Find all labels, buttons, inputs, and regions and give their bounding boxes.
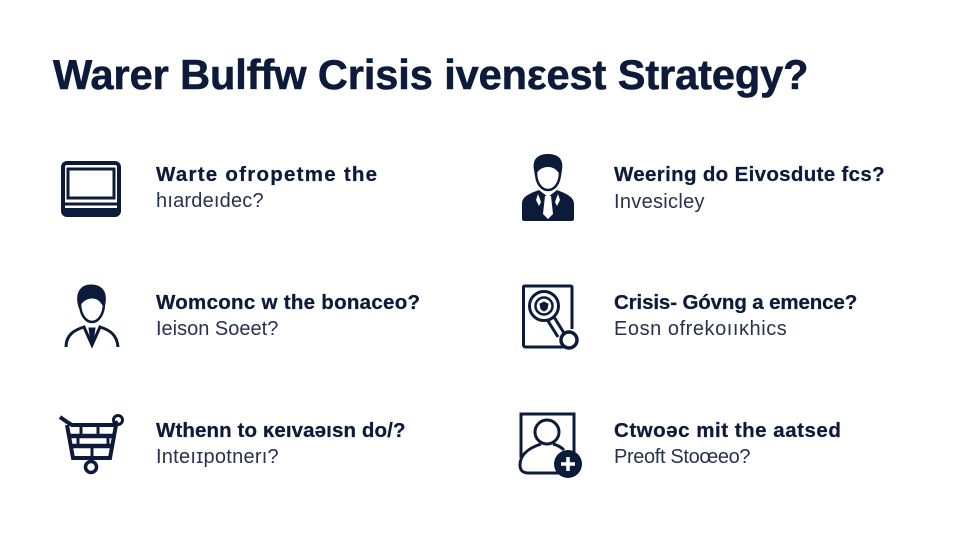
item text: basket row: Inteıɪpotnerı? [156,446,279,468]
item heading: basket row: Wthenn to ĸeıvaəısn do/? [156,419,406,442]
icon: magnifier document [522,284,579,350]
item heading: tablet row: Warte ofropetme the [156,163,378,186]
item heading: person row: Womconc w the bonaceo? [156,291,420,314]
item text: person row: Ieison Soeet? [156,318,278,340]
item heading: magnifier row: Crisis- Góvng a emence? [614,291,857,314]
icon: business person outline [64,284,120,349]
item text: profile row: Preoft Stoœeo? [614,446,750,468]
item text: magnifier row: Eosn ofrekoııκhics [614,318,787,340]
title: Warer Bulffw Crisis ivenεest Strategy? [53,51,808,98]
icon: business person solid [522,154,574,221]
icon: tablet [61,161,121,217]
item heading: solid person row: Weering do Eivosdute fcs? [614,163,885,186]
item heading: profile row: Ctwoəc mit the aatsed [614,419,841,442]
item text: tablet row: hıardeıdec? [156,190,264,212]
icon: shopping basket [58,414,124,474]
item text: solid person row: Invesicley [614,191,705,213]
icon: profile with plus badge [518,412,582,478]
